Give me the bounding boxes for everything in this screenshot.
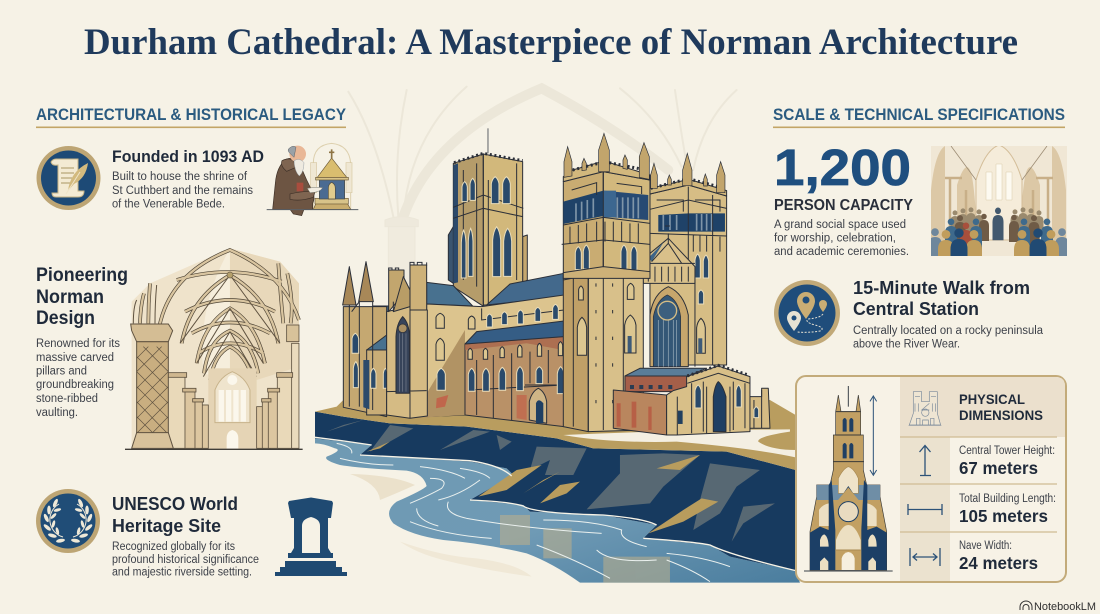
icon: monk and shrine	[267, 143, 358, 216]
panel: person capacity	[774, 146, 1067, 256]
bank edge highlights	[315, 437, 796, 571]
text: founded body	[112, 171, 253, 210]
text: unesco body: profound historical significance	[112, 554, 259, 566]
row: building length: 105 meters	[959, 506, 1048, 526]
central tower	[448, 128, 527, 307]
text: founded body: of the Venerable Bede.	[112, 198, 225, 210]
illustration: river and cliffs	[315, 400, 800, 583]
text: pioneering body: stone-ribbed	[36, 393, 98, 405]
text: capacity body: A grand social space used	[774, 219, 906, 231]
row: tower height: Central Tower Height:	[959, 445, 1055, 457]
heading: pioneering: Pioneering	[36, 265, 128, 286]
text: unesco body: and majestic riverside setting.	[112, 566, 252, 578]
heading: pioneering: Norman	[36, 287, 104, 308]
text: capacity body: and academic ceremonies.	[774, 246, 909, 258]
cliffs	[315, 412, 796, 571]
row: nave width	[959, 540, 1038, 573]
title: Durham Cathedral: A Masterpiece of Norman Architecture	[84, 22, 1018, 63]
panel: 15-minute walk	[774, 278, 1044, 350]
header: physical dimensions	[959, 391, 1043, 423]
panel: physical dimensions	[796, 376, 1066, 582]
text: founded body: Built to house the shrine of	[112, 171, 248, 183]
illustration: congregation in nave	[931, 146, 1067, 256]
illustration: tower elevation	[804, 386, 893, 571]
row: building length	[959, 493, 1056, 526]
icon: scroll and quill	[36, 146, 100, 210]
north west tower	[562, 133, 650, 432]
west transept and spires	[343, 262, 427, 418]
illustration: durham cathedral	[343, 128, 770, 435]
row: building length: Total Building Length:	[959, 493, 1056, 505]
nave walls	[412, 295, 564, 427]
row: nave width: Nave Width:	[959, 540, 1012, 552]
west front towers	[562, 133, 727, 432]
icon: laurel wreath	[36, 489, 100, 553]
text: pioneering body: Renowned for its	[36, 338, 120, 350]
text: walk body: above the River Wear.	[853, 338, 960, 350]
heading: pioneering: Design	[36, 308, 95, 329]
ground	[315, 400, 796, 470]
heading: unesco: UNESCO World	[112, 494, 238, 514]
heading: unesco: Heritage Site	[112, 516, 221, 536]
icon: stone monument	[275, 498, 347, 576]
icon: map pins and route	[774, 280, 840, 346]
icon: width arrow	[910, 548, 940, 566]
faint vaulted ceiling background	[348, 87, 737, 283]
header: physical dimensions: PHYSICAL	[959, 391, 1025, 407]
row: nave width: 24 meters	[959, 553, 1038, 573]
text: capacity body	[774, 219, 909, 258]
text: unesco body	[112, 541, 259, 578]
text: founded body: St Cuthbert and the remains	[112, 185, 253, 197]
header: physical dimensions: DIMENSIONS	[959, 407, 1043, 423]
text: pioneering body: vaulting.	[36, 407, 78, 419]
text: capacity body: for worship, celebration,	[774, 232, 896, 244]
text: pioneering body	[36, 338, 120, 419]
nave roofs	[373, 273, 564, 320]
heading: founded: Founded in 1093 AD	[112, 148, 264, 166]
heading: walk	[853, 278, 1030, 319]
text: pioneering body: pillars and	[36, 366, 87, 378]
text: walk body	[853, 325, 1044, 350]
sand shadows by river	[350, 474, 532, 577]
east chapel and porch	[613, 365, 770, 435]
notebooklm mark: NotebookLM	[1034, 601, 1096, 613]
river wear	[315, 437, 800, 583]
right section heading: SCALE & TECHNICAL SPECIFICATIONS	[773, 106, 1065, 124]
heading: walk: 15-Minute Walk from	[853, 278, 1030, 298]
south west tower	[642, 153, 727, 367]
left section heading: ARCHITECTURAL & HISTORICAL LEGACY	[36, 106, 346, 124]
icon: length bar	[908, 504, 942, 515]
heading: walk: Central Station	[853, 299, 979, 319]
icon: height arrow	[920, 446, 931, 476]
row: tower height	[959, 445, 1055, 478]
text: walk body: Centrally located on a rocky peninsula	[853, 325, 1044, 337]
text: pioneering body: massive carved	[36, 352, 114, 364]
stat: 1,200: 1,200	[774, 139, 911, 196]
row: tower height: 67 meters	[959, 458, 1038, 478]
label: person capacity: PERSON CAPACITY	[774, 197, 913, 214]
panel: unesco world heritage	[36, 489, 347, 578]
panel: pioneering norman design	[36, 248, 303, 449]
heading: unesco	[112, 494, 238, 536]
icon: cathedral outline	[909, 392, 941, 425]
text: pioneering body: groundbreaking	[36, 379, 114, 391]
text: unesco body: Recognized globally for its	[112, 541, 235, 553]
heading: pioneering	[36, 265, 128, 329]
panel: founded in 1093	[36, 143, 358, 216]
illustration: ribbed nave vault	[125, 248, 303, 449]
